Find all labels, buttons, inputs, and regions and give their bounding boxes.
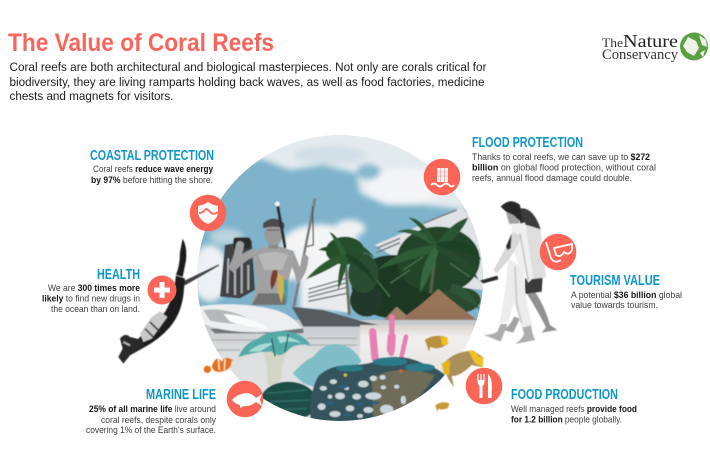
heading: FOOD PRODUCTION	[511, 387, 618, 403]
blue coral	[293, 344, 362, 390]
body text: value towards tourism.	[571, 300, 658, 311]
intro text: chests and magnets for visitors.	[10, 89, 174, 103]
intro text: biodiversity, they are living ramparts holding back waves, as well as food factories, medicine	[10, 75, 485, 89]
fish: yellow angelfish	[204, 336, 483, 412]
catch of fish	[270, 270, 288, 303]
front figure	[480, 201, 535, 344]
icon: medical cross	[148, 276, 176, 304]
body text: A potential $36 billion global	[571, 290, 682, 301]
heading: COASTAL PROTECTION	[90, 148, 214, 164]
body text: Thanks to coral reefs, we can save up to $272	[472, 152, 650, 163]
thatched huts	[384, 288, 477, 320]
sky	[198, 156, 483, 321]
body text: covering 1% of the Earth's surface.	[86, 425, 216, 436]
spear	[294, 198, 315, 306]
body text	[571, 290, 682, 311]
icon: fish	[227, 381, 263, 417]
body text: by 97% before hitting the shore.	[91, 175, 213, 186]
pink coral	[373, 317, 406, 358]
central circular collage	[190, 130, 493, 430]
clouds	[197, 135, 467, 314]
panel: coastal protection	[90, 148, 226, 231]
heading: FLOOD PROTECTION	[472, 135, 583, 151]
clownfish	[204, 358, 232, 373]
body text: 25% of all marine life live around	[89, 404, 216, 415]
diver	[118, 239, 219, 364]
body text: for 1.2 billion people globally.	[511, 414, 622, 426]
body text: We are 300 times more	[48, 283, 140, 294]
dark reef base	[262, 381, 314, 417]
walking couple	[480, 201, 557, 344]
panel: tourism value	[540, 234, 682, 311]
body text: the ocean than on land.	[51, 304, 140, 315]
logo: The Nature Conservancy: The	[602, 36, 623, 50]
body text: coral reefs, despite corals only	[101, 415, 216, 426]
heading: MARINE LIFE	[146, 387, 216, 403]
fisherman	[231, 202, 305, 305]
body text: likely to find new drugs in	[42, 294, 140, 304]
back figure	[503, 208, 557, 333]
body text: billion on global flood protection, without coral	[472, 162, 656, 174]
hotel buildings	[375, 207, 483, 290]
sea and sand	[204, 319, 477, 418]
body text	[511, 404, 637, 426]
intro text: Coral reefs are both architectural and biological masterpieces. Not only are corals critical for	[10, 60, 486, 74]
heading: HEALTH	[97, 267, 140, 283]
logo: The Nature Conservancy: Nature	[623, 31, 678, 51]
palm trees	[306, 217, 482, 318]
swim fins	[220, 237, 255, 298]
logo: The Nature Conservancy: Conservancy	[602, 47, 679, 63]
body text: Well managed reefs provide food	[511, 404, 637, 415]
icon: fork and knife	[466, 368, 502, 404]
icon: green globe	[680, 32, 708, 60]
panel: health	[42, 267, 176, 315]
icon: snorkel mask	[540, 234, 576, 270]
fish: small yellow fish	[435, 402, 449, 412]
body text: Coral reefs reduce wave energy	[93, 164, 214, 175]
panel: marine life	[86, 381, 263, 436]
panel: food production	[466, 368, 637, 426]
body text	[91, 164, 214, 186]
mushroom coral	[238, 331, 311, 385]
breaking wave	[198, 304, 302, 332]
body text: reefs, annual flood damage could double.	[472, 173, 632, 184]
body text	[472, 152, 656, 184]
body text	[42, 283, 140, 315]
panel: flood protection	[424, 135, 656, 195]
icon: shield	[190, 195, 226, 231]
heading: TOURISM VALUE	[570, 273, 660, 289]
body text	[86, 404, 216, 436]
icon: building on water	[424, 159, 460, 195]
intro text	[10, 60, 486, 103]
title: The Value of Coral Reefs	[8, 29, 274, 57]
main reef	[310, 357, 445, 425]
logo: The Nature Conservancy	[602, 31, 708, 63]
